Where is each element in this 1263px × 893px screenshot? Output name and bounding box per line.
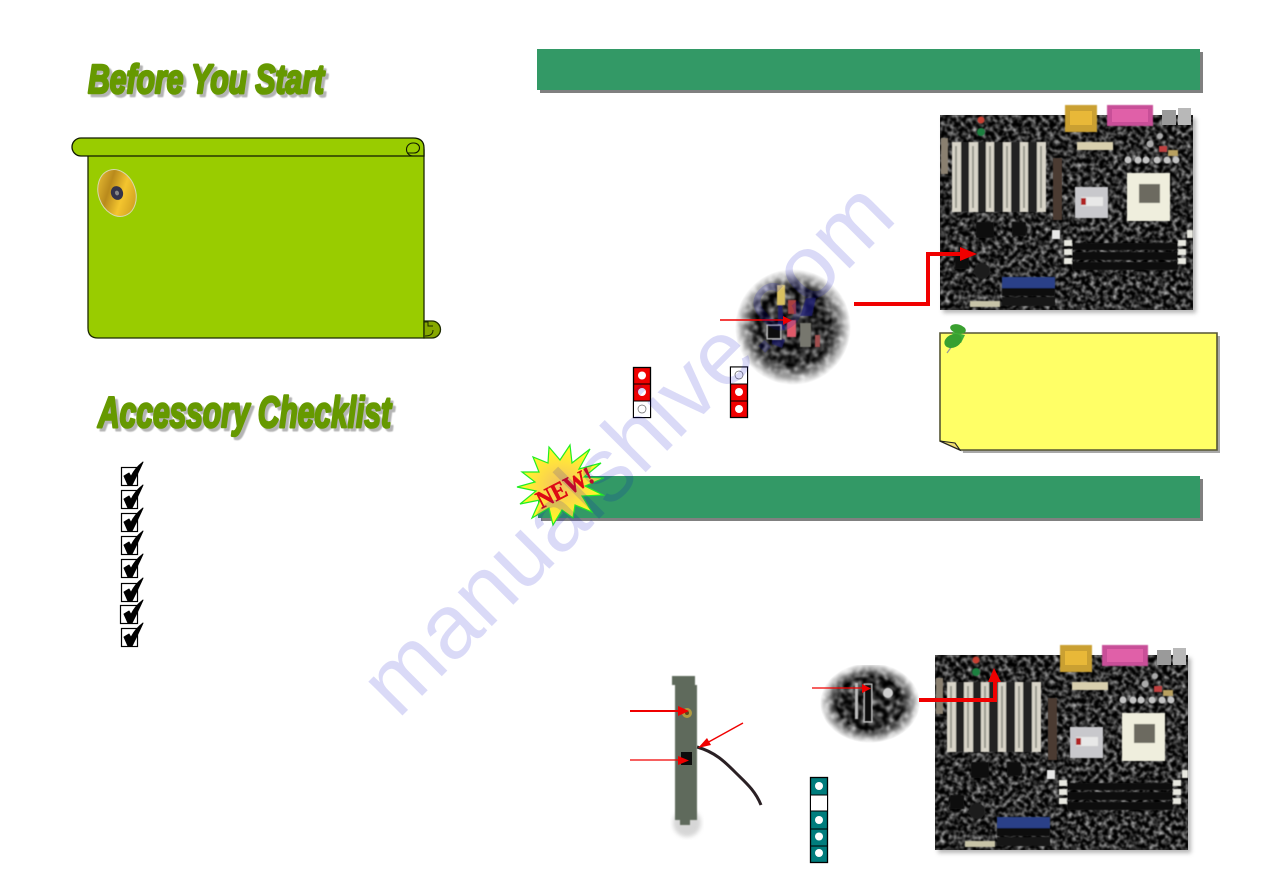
badge: NEW starburst — [517, 445, 604, 525]
panel: scroll with CD — [72, 138, 440, 338]
checkbox 5 — [122, 554, 143, 578]
arrow: zoom view to bottom motherboard header — [919, 668, 1001, 700]
arrow: thin pointer to zoomed jumper — [720, 316, 792, 325]
icon: gold CD — [91, 164, 143, 222]
checkbox 6 — [122, 578, 143, 602]
header bar: top section — [537, 49, 1203, 93]
checkbox 8 — [122, 623, 143, 646]
scroll top bar — [72, 138, 424, 156]
icon: green push pin — [942, 323, 967, 353]
arrow: thin pointer to header pins — [812, 684, 871, 693]
jumper diagram: teal header — [810, 778, 828, 862]
arrow: optical port pointer — [630, 756, 689, 765]
motherboard photo: top — [940, 105, 1196, 313]
zoomed circular board detail: bottom — [820, 665, 920, 742]
note: yellow sticky with pin — [940, 323, 1220, 453]
checkbox 2 — [122, 485, 143, 508]
header bar: second section — [538, 476, 1203, 521]
checkbox 4 — [122, 531, 143, 554]
optical port — [681, 752, 692, 765]
arrow: coaxial connector pointer — [630, 706, 689, 716]
arrow: zoom view to motherboard jumper — [854, 247, 977, 304]
zoomed circular board detail: top — [733, 267, 853, 387]
title: Accessory Checklist: Accessory Checklist — [97, 388, 393, 437]
jumper diagram: left red — [634, 368, 650, 418]
photo: bracket with cable — [672, 676, 761, 837]
badge: NEW starburst: NEW! — [532, 463, 599, 514]
jumper diagram: right red — [730, 367, 748, 418]
scroll bottom-right curl — [424, 321, 440, 338]
gold connector — [682, 708, 692, 718]
checklist: eight ticked boxes — [120, 462, 143, 646]
arrow: cable pointer — [698, 723, 743, 748]
checkbox 3 — [122, 508, 143, 532]
motherboard photo: bottom — [935, 645, 1191, 853]
checkbox 1 — [122, 462, 143, 486]
title: Before You Start: Before You Start — [88, 56, 326, 102]
watermark: manualshive.com — [341, 162, 913, 734]
checkbox 7 — [120, 600, 143, 624]
